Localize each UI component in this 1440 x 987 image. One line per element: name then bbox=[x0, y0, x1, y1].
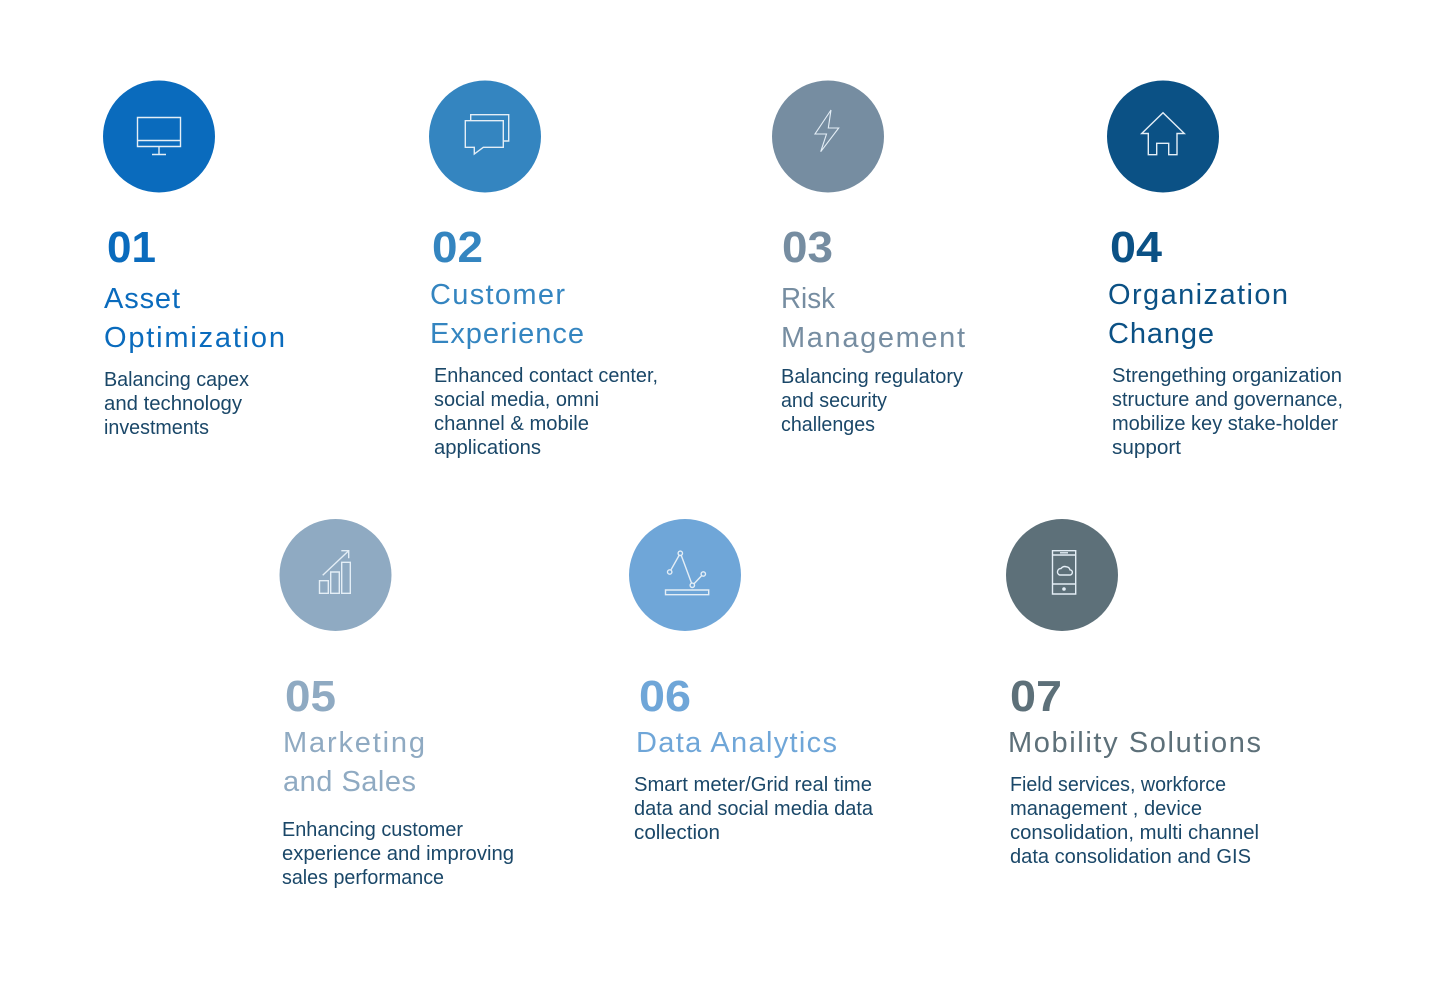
heading: Asset Optimization: Asset bbox=[104, 283, 180, 315]
text block: Organization Change description: structure and governance, bbox=[1112, 389, 1343, 411]
heading: Asset Optimization bbox=[104, 283, 285, 354]
text block: Mobility Solutions description: data consolidation and GIS bbox=[1010, 846, 1251, 868]
heading: Organization Change: Organization bbox=[1108, 279, 1288, 311]
heading: Marketing and Sales: Marketing bbox=[283, 727, 425, 759]
panel: 01 Asset Optimization bbox=[103, 80, 285, 439]
text block: Risk Management description: challenges bbox=[781, 414, 875, 436]
text block: Asset Optimization description: Balancing capex bbox=[104, 369, 249, 391]
text block: Mobility Solutions description: consolidation, multi channel bbox=[1010, 822, 1259, 844]
text block: Customer Experience description bbox=[434, 365, 658, 459]
panel: 05 Marketing and Sales bbox=[280, 519, 514, 889]
text block: Customer Experience description: channel & mobile bbox=[434, 413, 589, 435]
icon: house bbox=[1107, 80, 1219, 192]
text block: Risk Management description: Balancing regulatory bbox=[781, 366, 963, 388]
text block: Organization Change description: Strengething organization bbox=[1112, 365, 1342, 387]
panel: 07 Mobility Solutions bbox=[1006, 519, 1261, 868]
text block: Risk Management description bbox=[781, 366, 963, 436]
text block: Mobility Solutions description: Field services, workforce bbox=[1010, 774, 1226, 796]
number 03: 03 bbox=[782, 223, 833, 272]
text block: Organization Change description: mobilize key stake-holder bbox=[1112, 413, 1338, 435]
number 02: 02 bbox=[432, 223, 483, 272]
text block: Mobility Solutions description: management , device bbox=[1010, 798, 1202, 820]
text block: Customer Experience description: applications bbox=[434, 437, 541, 459]
heading: Organization Change: Change bbox=[1108, 318, 1214, 350]
text block: Data Analytics description: Smart meter/Grid real time bbox=[634, 774, 872, 796]
heading: Marketing and Sales bbox=[283, 727, 425, 798]
icon: smartphone with cloud bbox=[1006, 519, 1118, 631]
heading: Customer Experience bbox=[430, 279, 584, 350]
heading: Customer Experience: Experience bbox=[430, 318, 584, 350]
icon: line chart bbox=[629, 519, 741, 631]
text block: Mobility Solutions description bbox=[1010, 774, 1259, 868]
text block: Organization Change description bbox=[1112, 365, 1343, 459]
heading: Organization Change bbox=[1108, 279, 1288, 350]
text block: Data Analytics description bbox=[634, 774, 874, 844]
text block: Asset Optimization description: and technology bbox=[104, 393, 242, 415]
heading: Risk Management: Risk bbox=[781, 283, 835, 315]
text block: Asset Optimization description bbox=[104, 369, 249, 439]
text block: Marketing and Sales description: Enhancing customer bbox=[282, 819, 463, 841]
heading: Customer Experience: Customer bbox=[430, 279, 565, 311]
number 07: 07 bbox=[1010, 672, 1062, 721]
number 06: 06 bbox=[639, 672, 691, 721]
text block: Data Analytics description: data and social media data bbox=[634, 798, 874, 820]
heading: Risk Management: Management bbox=[781, 322, 965, 354]
number 01: 01 bbox=[107, 223, 156, 272]
text block: Data Analytics description: collection bbox=[634, 822, 720, 844]
number 05: 05 bbox=[285, 672, 336, 721]
heading: Asset Optimization: Optimization bbox=[104, 322, 285, 354]
text block: Customer Experience description: Enhanced contact center, bbox=[434, 365, 658, 387]
number 04: 04 bbox=[1110, 223, 1163, 272]
text block: Marketing and Sales description: sales performance bbox=[282, 867, 444, 889]
heading: Risk Management bbox=[781, 283, 965, 354]
icon: growth bar chart bbox=[280, 519, 392, 631]
heading: Mobility Solutions: Mobility Solutions bbox=[1008, 727, 1261, 759]
icon: monitor bbox=[103, 80, 215, 192]
heading: Data Analytics: Data Analytics bbox=[636, 727, 837, 759]
icon: chat bubbles bbox=[429, 80, 541, 192]
panel: 06 Data Analytics bbox=[629, 519, 874, 844]
text block: Organization Change description: support bbox=[1112, 437, 1181, 459]
text block: Asset Optimization description: investments bbox=[104, 417, 209, 439]
icon: lightning bolt bbox=[772, 80, 884, 192]
panel: 02 Customer Experience bbox=[429, 80, 658, 459]
panel: 03 Risk Management bbox=[772, 80, 965, 436]
text block: Risk Management description: and security bbox=[781, 390, 887, 412]
heading: Marketing and Sales: and Sales bbox=[283, 766, 416, 798]
text block: Marketing and Sales description bbox=[282, 819, 514, 889]
text block: Customer Experience description: social media, omni bbox=[434, 389, 599, 411]
text block: Marketing and Sales description: experience and improving bbox=[282, 843, 514, 865]
panel: 04 Organization Change bbox=[1107, 80, 1343, 459]
